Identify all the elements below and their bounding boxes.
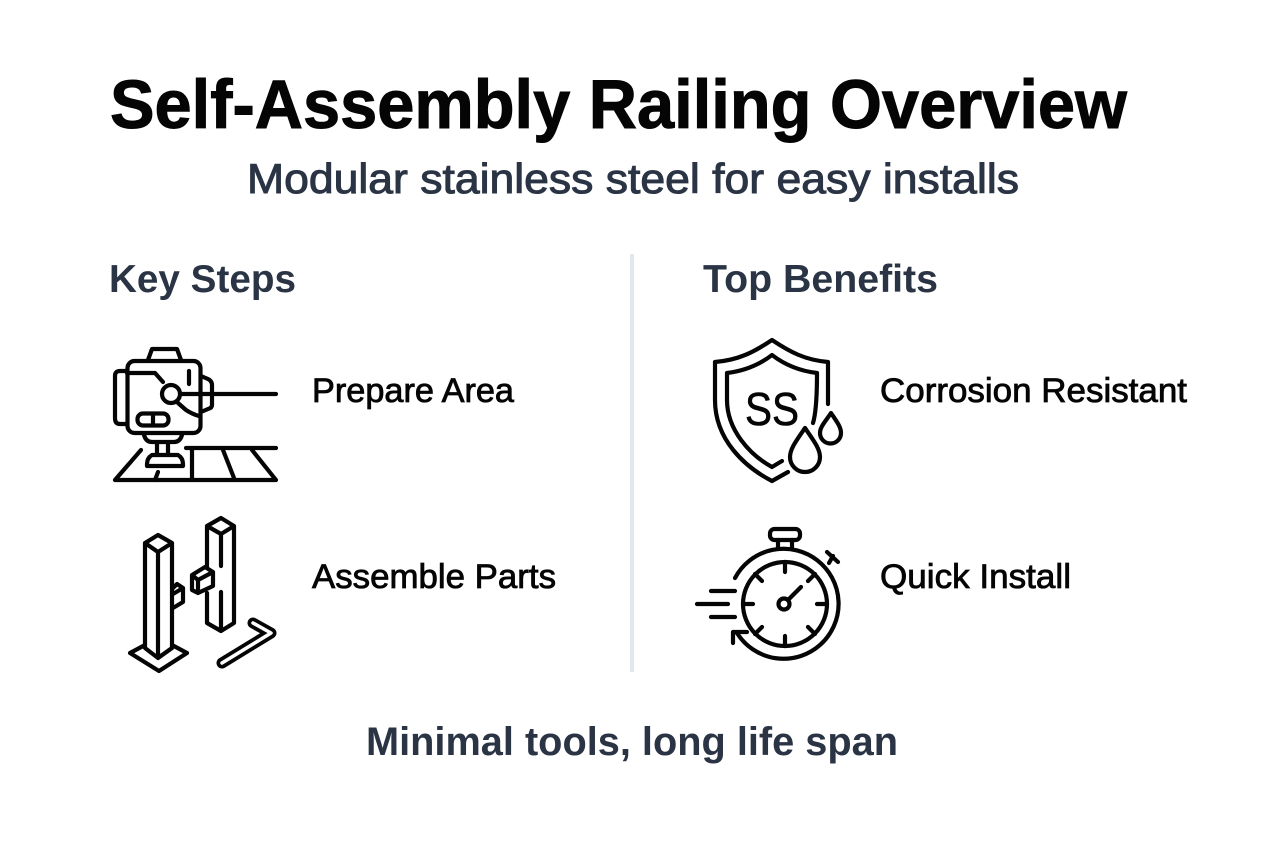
icon text: SS: SS [745, 383, 799, 435]
icon: railing posts and hex key [130, 518, 271, 671]
subtitle: Modular stainless steel for easy installs [247, 155, 1019, 202]
title: Self-Assembly Railing Overview [110, 66, 1127, 143]
divider [630, 254, 634, 672]
icon: laser level on floor [115, 349, 276, 480]
label: quick install: Quick Install [880, 558, 1071, 596]
icon: stopwatch [697, 529, 839, 659]
label: prepare area: Prepare Area [312, 372, 514, 410]
label: corrosion resistant: Corrosion Resistant [880, 372, 1188, 410]
heading: key steps: Key Steps [109, 258, 296, 301]
heading: top benefits: Top Benefits [703, 258, 938, 301]
icon: stainless shield with drops [715, 340, 841, 481]
footer tagline: Minimal tools, long life span [366, 720, 898, 764]
label: assemble parts: Assemble Parts [312, 558, 556, 596]
